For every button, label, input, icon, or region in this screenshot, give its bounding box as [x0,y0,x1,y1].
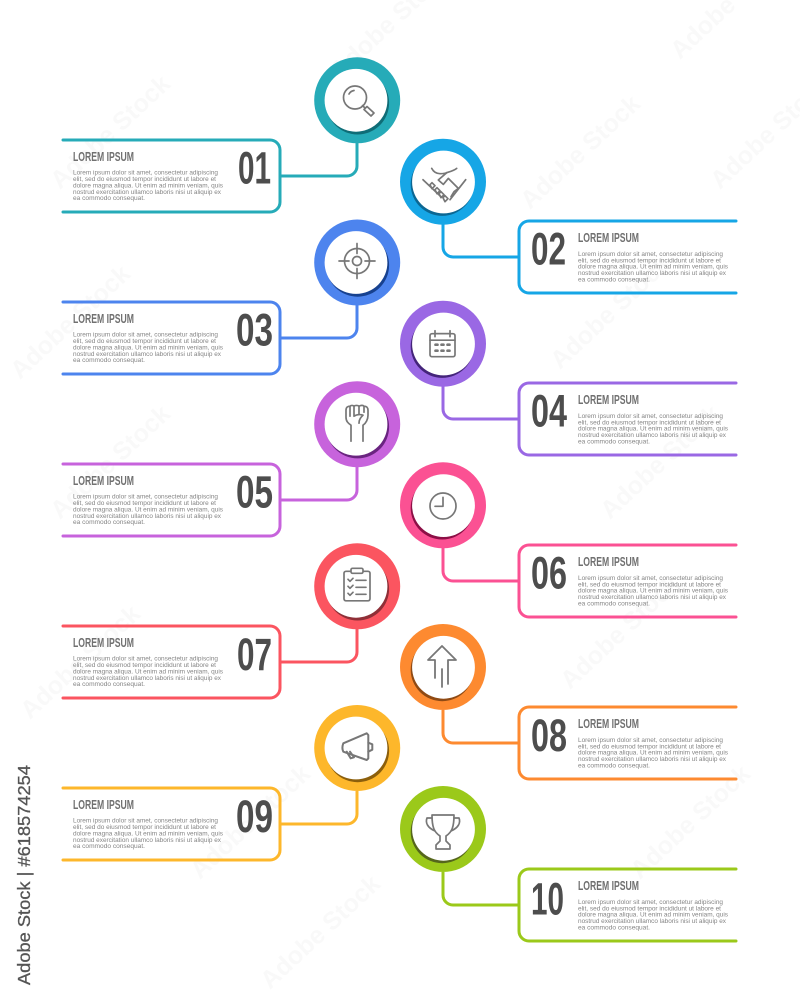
circle 06 [400,462,486,548]
text box 08: Lorem ipsum dolor sit amet, consectetur adipiscing [578,737,724,744]
text box 09: 09 [236,791,273,842]
text box 05: 05 [236,466,273,518]
icon: raised fist [346,405,368,441]
text box 09: LOREM IPSUM [73,798,134,812]
text box 08: LOREM IPSUM [578,717,639,731]
icon: upward arrow [428,646,456,687]
text box 08: dolore magna aliqua. Ut enim ad minim veniam, quis [578,750,728,757]
text box 09: dolore magna aliqua. Ut enim ad minim veniam, quis [73,830,223,837]
connector 06 [443,548,519,581]
watermark pattern: Adobe Stock [255,870,386,994]
text box 08: elit, sed do eiusmod tempor incididunt ut labore et [578,743,721,750]
circle 08 [400,624,486,710]
text box 03: elit, sed do eiusmod tempor incididunt ut labore et [73,338,216,345]
text box 02: elit, sed do eiusmod tempor incididunt ut labore et [578,257,721,264]
item 05 [63,381,400,536]
text box 03: ea commodo consequat. [73,357,145,364]
watermark pattern: Adobe Stock [545,250,676,374]
text box 04: LOREM IPSUM [578,393,639,407]
circle 07 [314,543,400,629]
text box 09 [63,788,280,860]
text box 06: Lorem ipsum dolor sit amet, consectetur adipiscing [578,575,724,582]
text box 04: elit, sed do eiusmod tempor incididunt ut labore et [578,419,721,426]
text box 02: nostrud exercitation ullamco laboris nisi ut aliquip ex [578,270,727,277]
connector 01 [281,143,357,176]
icon: trophy [426,815,460,849]
text box 04: ea commodo consequat. [578,438,650,446]
circle 02 [400,139,486,225]
watermark pattern: Adobe Stock [595,400,726,524]
text box 04 [519,383,736,455]
text box 09: ea commodo consequat. [73,843,145,850]
text box 08: ea commodo consequat. [578,762,650,770]
text box 10: Lorem ipsum dolor sit amet, consectetur adipiscing [578,899,724,906]
item 10 [400,786,736,941]
text box 05: Lorem ipsum dolor sit amet, consectetur adipiscing [73,494,219,501]
text box 01 [63,140,280,212]
text box 07: Lorem ipsum dolor sit amet, consectetur adipiscing [73,656,219,663]
item 02 [400,139,736,293]
text box 07 [63,626,280,698]
icon: magnifier [344,86,374,116]
watermark pattern: Adobe Stock [45,70,176,194]
item 09 [63,705,400,860]
text box 02: 02 [531,224,566,274]
text box 07: 07 [237,629,272,680]
text box 02: dolore magna aliqua. Ut enim ad minim veniam, quis [578,264,728,271]
connector 04 [443,386,519,419]
circle 01 [314,57,400,143]
text box 10: dolore magna aliqua. Ut enim ad minim veniam, quis [578,912,728,919]
text box 04: nostrud exercitation ullamco laboris nisi ut aliquip ex [578,432,727,439]
text box 05: ea commodo consequat. [73,519,145,526]
item 07 [63,543,400,698]
icon: clock [430,493,456,519]
text box 03 [63,302,280,374]
text box 07: nostrud exercitation ullamco laboris nisi ut aliquip ex [73,675,222,682]
text box 10 [519,869,736,941]
text box 09: elit, sed do eiusmod tempor incididunt ut labore et [73,824,216,831]
icon: checklist clipboard [344,568,370,601]
connector 07 [281,629,357,662]
text box 06 [519,545,736,617]
text box 03: 03 [236,304,273,356]
watermark pattern: Adobe Stock [515,90,646,214]
text box 10: ea commodo consequat. [578,924,650,932]
watermark pattern: Adobe Stock [625,760,756,884]
circle 05 [314,381,400,467]
text box 01: Lorem ipsum dolor sit amet, consectetur adipiscing [73,170,219,177]
text box 04: Lorem ipsum dolor sit amet, consectetur adipiscing [578,413,724,420]
text box 06: dolore magna aliqua. Ut enim ad minim veniam, quis [578,588,728,595]
text box 08 [519,707,736,779]
circle 09 [314,705,400,791]
text box 03: Lorem ipsum dolor sit amet, consectetur adipiscing [73,332,219,339]
text box 06: LOREM IPSUM [578,555,639,569]
text box 09: Lorem ipsum dolor sit amet, consectetur adipiscing [73,818,219,825]
text box 01: LOREM IPSUM [73,150,134,164]
connector 02 [443,224,519,257]
watermark pattern: Adobe Stock [555,570,686,694]
icon: megaphone [342,733,372,760]
text box 03: LOREM IPSUM [73,312,134,326]
connector 10 [443,872,519,905]
item 03 [63,220,400,374]
text box 04: dolore magna aliqua. Ut enim ad minim veniam, quis [578,426,728,433]
text box 04: 04 [531,386,567,436]
text box 02: Lorem ipsum dolor sit amet, consectetur adipiscing [578,251,724,258]
text box 05: nostrud exercitation ullamco laboris nisi ut aliquip ex [73,513,222,520]
text box 03: nostrud exercitation ullamco laboris nisi ut aliquip ex [73,351,222,358]
icon: calendar [430,331,455,357]
text box 06: nostrud exercitation ullamco laboris nisi ut aliquip ex [578,594,727,601]
text box 09: nostrud exercitation ullamco laboris nisi ut aliquip ex [73,837,222,844]
text box 01: dolore magna aliqua. Ut enim ad minim veniam, quis [73,182,223,189]
text box 06: ea commodo consequat. [578,600,650,608]
watermark pattern: Adobe Stock [15,600,146,724]
watermark pattern: Adobe Stock [45,400,176,524]
circle 10 [400,786,486,872]
text box 05: dolore magna aliqua. Ut enim ad minim veniam, quis [73,506,223,513]
text box 05 [63,464,280,536]
text box 07: LOREM IPSUM [73,636,134,650]
text box 10: elit, sed do eiusmod tempor incididunt ut labore et [578,905,721,912]
text box 01: elit, sed do eiusmod tempor incididunt ut labore et [73,176,216,183]
item 04 [400,301,736,455]
connector 08 [443,710,519,743]
watermark pattern: Adobe Stock [5,260,136,384]
text box 02 [519,221,736,293]
circle 04 [400,301,486,387]
text box 10: nostrud exercitation ullamco laboris nisi ut aliquip ex [578,918,727,925]
connector 03 [281,305,357,338]
circle 03 [314,220,400,306]
icon: target [339,244,375,278]
text box 07: dolore magna aliqua. Ut enim ad minim veniam, quis [73,668,223,675]
text box 08: 08 [531,710,567,761]
text box 07: ea commodo consequat. [73,681,145,688]
text box 03: dolore magna aliqua. Ut enim ad minim veniam, quis [73,344,223,351]
text box 01: nostrud exercitation ullamco laboris nisi ut aliquip ex [73,189,222,196]
connector 09 [281,791,357,824]
icon: handshake [423,168,466,202]
text box 05: elit, sed do eiusmod tempor incididunt ut labore et [73,500,216,507]
text box 02: LOREM IPSUM [578,231,639,245]
item 08 [400,624,736,779]
watermark pattern: Adobe Stock [185,760,316,884]
stock credit: Adobe Stock | #618574254 [14,765,34,985]
text box 06: elit, sed do eiusmod tempor incididunt ut labore et [578,581,721,588]
text box 07: elit, sed do eiusmod tempor incididunt ut labore et [73,662,216,669]
text box 01: ea commodo consequat. [73,195,145,202]
item 01 [63,57,400,212]
text box 01: 01 [238,142,271,194]
text box 06: 06 [531,548,567,598]
text box 02: ea commodo consequat. [578,276,650,284]
text box 05: LOREM IPSUM [73,474,134,488]
item 06 [400,462,736,617]
connector 05 [281,467,357,500]
text box 08: nostrud exercitation ullamco laboris nisi ut aliquip ex [578,756,727,763]
text box 10: LOREM IPSUM [578,879,639,893]
text box 10: 10 [531,874,564,924]
